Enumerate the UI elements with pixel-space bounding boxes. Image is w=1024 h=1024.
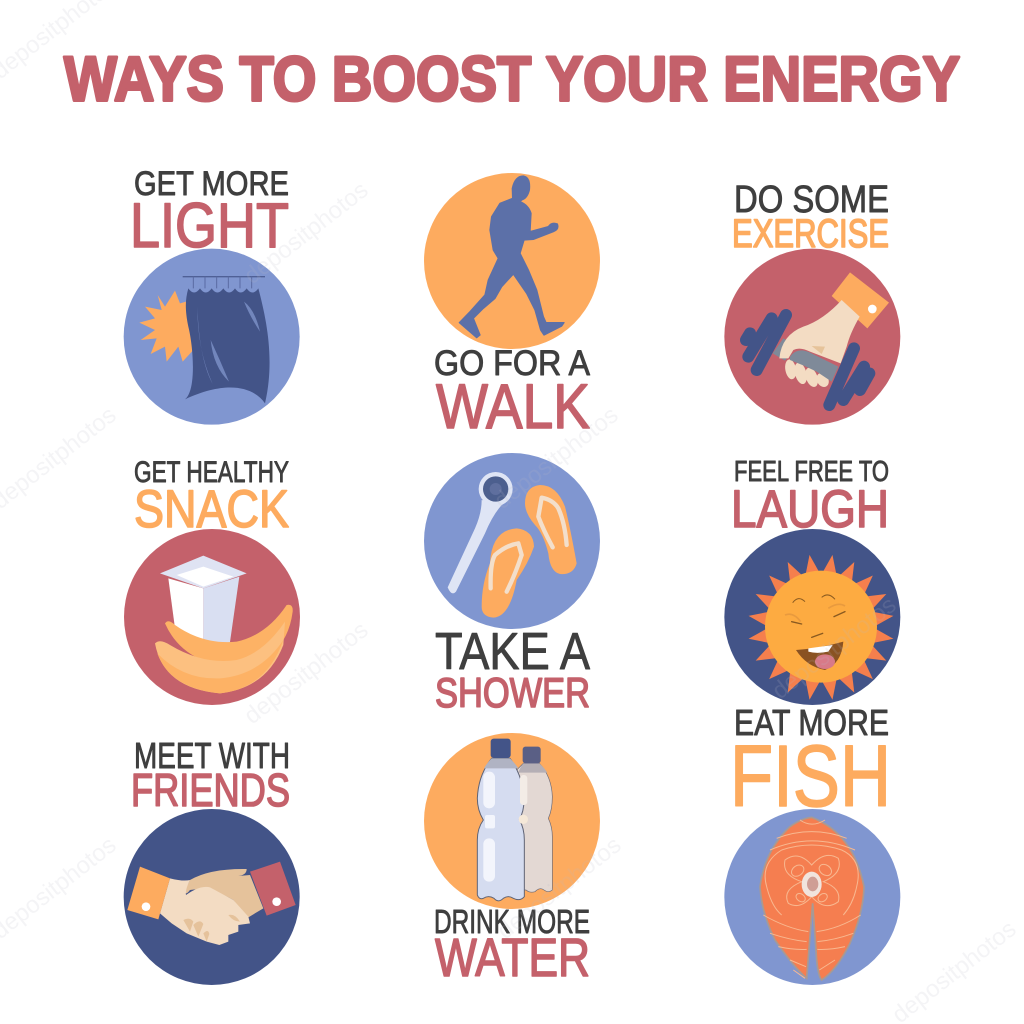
heading: take a shower: SHOWER — [435, 669, 590, 716]
panel: eat more fish — [724, 702, 900, 985]
heading: go for a walk — [434, 344, 591, 442]
panel: get healthy snack — [124, 456, 300, 705]
heading: eat more fish: EAT MORE — [734, 702, 889, 743]
heading: drink more water: DRINK MORE — [434, 903, 590, 940]
heading: feel free to laugh: FEEL FREE TO — [734, 456, 889, 488]
heading: eat more fish: FISH — [730, 728, 891, 825]
icon: shower head and flip flops — [424, 453, 600, 629]
heading: go for a walk: GO FOR A — [434, 344, 591, 383]
heading: get healthy snack — [134, 456, 289, 539]
heading: go for a walk: WALK — [436, 372, 590, 442]
icon: walking man — [424, 173, 600, 349]
heading: feel free to laugh — [731, 456, 889, 539]
heading: meet with friends: FRIENDS — [131, 764, 290, 816]
icon: hand with dumbbell — [724, 249, 900, 425]
heading: get healthy snack: GET HEALTHY — [134, 456, 289, 489]
watermark: depositphotos — [239, 616, 373, 730]
panel: go for a walk — [424, 173, 600, 442]
heading: eat more fish — [730, 702, 891, 825]
panel: feel free to laugh — [724, 456, 900, 705]
icon: handshake — [124, 809, 300, 985]
panel: do some exercise — [724, 179, 900, 425]
panel: meet with friends — [124, 735, 300, 985]
icon: water bottles — [424, 733, 600, 909]
watermark: depositphotos — [767, 591, 901, 705]
heading: do some exercise: EXERCISE — [732, 212, 889, 256]
panel: get more light — [124, 165, 300, 425]
heading: drink more water: WATER — [435, 928, 590, 988]
heading: do some exercise: DO SOME — [734, 179, 889, 221]
heading: feel free to laugh: LAUGH — [731, 480, 889, 539]
heading: get more light — [130, 165, 289, 261]
heading: take a shower — [435, 623, 590, 716]
watermark: depositphotos — [489, 401, 623, 515]
panel: take a shower — [424, 453, 600, 716]
heading: drink more water — [434, 903, 590, 988]
watermark: depositphotos — [239, 176, 373, 290]
icon: salmon steak — [724, 809, 900, 985]
icon: curtain and sun — [124, 249, 300, 425]
icon: laughing sun — [724, 529, 900, 705]
heading: get more light: LIGHT — [130, 191, 289, 261]
watermark: depositphotos — [492, 831, 626, 945]
heading: do some exercise — [732, 179, 889, 256]
panel: drink more water — [424, 733, 600, 988]
icon: yogurt and banana — [124, 529, 300, 705]
heading: meet with friends: MEET WITH — [134, 735, 290, 776]
heading: meet with friends — [131, 735, 290, 816]
heading: get more light: GET MORE — [134, 165, 289, 203]
heading: get healthy snack: SNACK — [134, 480, 289, 539]
heading: take a shower: TAKE A — [435, 623, 590, 681]
